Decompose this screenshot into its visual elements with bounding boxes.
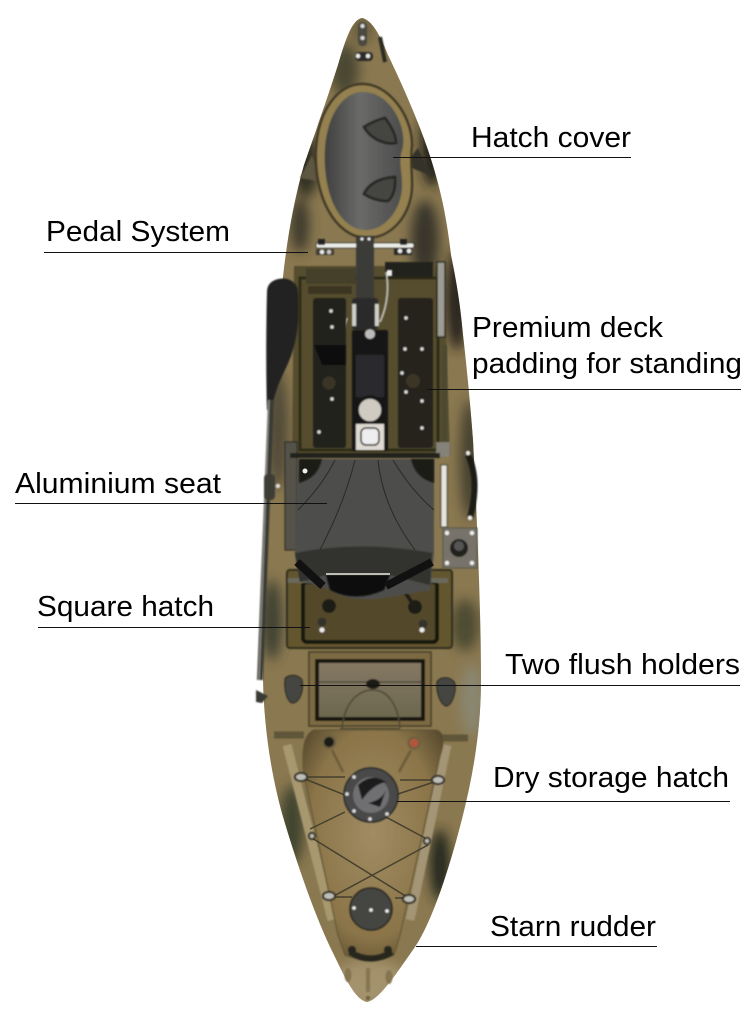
square hatch [287, 570, 452, 648]
side ridges by hatch [300, 148, 432, 182]
side rail [437, 262, 447, 445]
aluminium seat [285, 442, 450, 599]
recess around hatch cover [316, 84, 412, 238]
paddle [256, 278, 299, 703]
rear tank well [303, 730, 443, 960]
rod holder mount [443, 451, 477, 568]
label: Starn rudder: Starn rudder [490, 911, 656, 943]
storage box [309, 652, 431, 729]
center console [352, 329, 388, 451]
seat mesh [295, 459, 434, 599]
bungee cords [300, 777, 440, 900]
deck padding right [398, 298, 433, 448]
scupper ports [323, 736, 420, 772]
seat corners [299, 459, 434, 483]
label: Two flush holders: Two flush holders [505, 649, 740, 681]
hatch cover handles [364, 118, 396, 201]
label: Dry storage hatch: Dry storage hatch [493, 762, 729, 794]
hatch cover [325, 92, 403, 230]
seat frame [285, 442, 450, 583]
label: Premium deck padding for standing: padding for standing [472, 348, 742, 380]
flush holder right [437, 678, 455, 706]
stern handle and rudder mount [344, 946, 392, 1000]
rear deck rails [274, 735, 468, 920]
label: Aluminium seat: Aluminium seat [15, 468, 221, 500]
cockpit footwell [292, 262, 450, 456]
bow fittings [355, 22, 385, 62]
label: Pedal System: Pedal System [46, 216, 230, 248]
label: Premium deck padding for standing: Premium deck [472, 312, 664, 344]
deck padding left [313, 298, 346, 448]
pedal system [316, 236, 414, 350]
hull body with camouflage [262, 18, 481, 1002]
label: Hatch cover: Hatch cover [471, 122, 631, 154]
bungee eyelets [295, 773, 444, 903]
flush holder left [285, 675, 303, 703]
label: Square hatch: Square hatch [37, 591, 214, 623]
kayak [250, 10, 490, 1010]
stern round hatch [350, 888, 392, 930]
label: Premium deck padding for standing [427, 312, 742, 390]
dry storage hatch [344, 768, 398, 822]
